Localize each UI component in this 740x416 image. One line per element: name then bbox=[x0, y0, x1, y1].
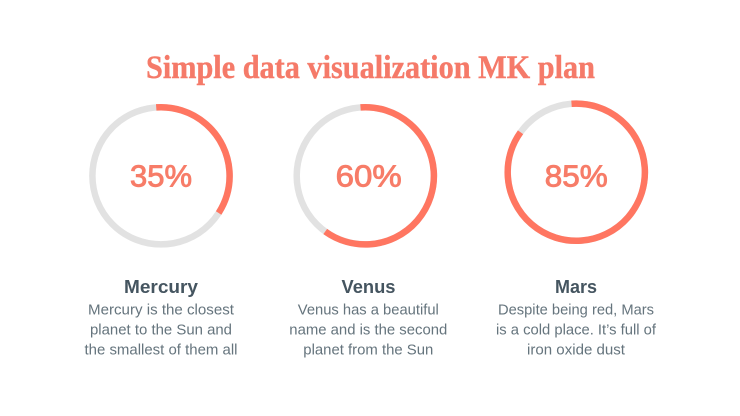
donut chart: Venus 60%: 60% bbox=[336, 159, 402, 194]
donut chart: Mercury 35%: 35% bbox=[130, 159, 192, 194]
heading: Mars: Mars bbox=[555, 276, 597, 297]
panel: Venus bbox=[289, 103, 447, 358]
text block: Mars description: iron oxide dust bbox=[527, 342, 626, 358]
text block: Mercury description: Mercury is the closest bbox=[88, 302, 235, 319]
text block: Mars description bbox=[496, 302, 657, 358]
title: Simple data visualization MK plan bbox=[146, 50, 595, 86]
text block: Venus description: planet from the Sun bbox=[303, 342, 433, 358]
donut chart: Mars 85%: 85% bbox=[545, 159, 608, 194]
donut chart: Venus 60% bbox=[292, 103, 439, 249]
panel: Mercury bbox=[84, 103, 238, 358]
panel: Mars bbox=[496, 99, 657, 358]
text block: Mars description: is a cold place. It’s full of bbox=[496, 322, 657, 339]
text block: Mercury description: the smallest of them all bbox=[84, 342, 238, 358]
text block: Venus description: Venus has a beautiful bbox=[298, 302, 439, 319]
text block: Mercury description: planet to the Sun and bbox=[90, 322, 232, 339]
donut chart: Mercury 35% bbox=[88, 103, 234, 249]
text block: Mercury description bbox=[84, 302, 238, 358]
heading: Venus: Venus bbox=[342, 276, 396, 297]
text block: Venus description: name and is the second bbox=[289, 322, 447, 339]
heading: Mercury: Mercury bbox=[124, 276, 199, 297]
donut chart: Mars 85% bbox=[503, 99, 650, 245]
text block: Venus description bbox=[289, 302, 447, 358]
text block: Mars description: Despite being red, Mars bbox=[498, 302, 654, 319]
